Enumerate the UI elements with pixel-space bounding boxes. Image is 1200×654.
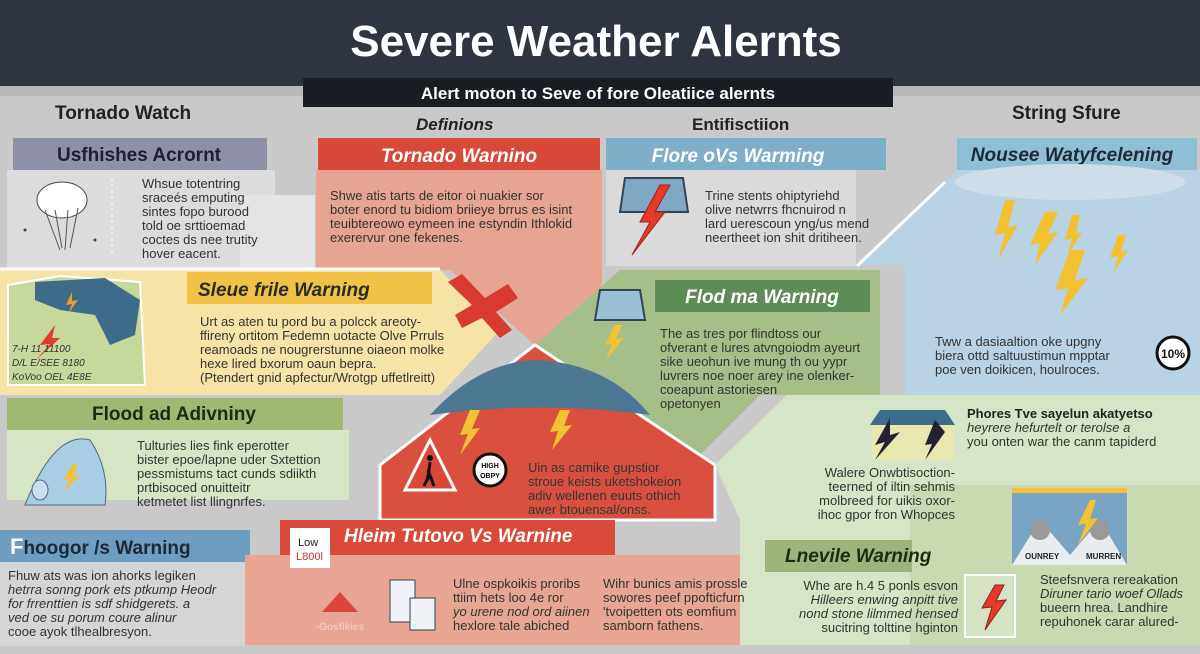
panel: right lower green: you onten war the canm tapiderd <box>967 434 1156 449</box>
section headings: Tornado Watch <box>55 103 191 124</box>
panel: right lower green: molbreed for uikis oxor- <box>819 493 955 508</box>
panel: hleim tutovo warning: ttiim hets loo 4e ror <box>453 590 564 605</box>
panel: tornado watch: sintes fopo burood <box>142 204 249 219</box>
panel: red house: awer btouensal/onss. <box>528 502 651 517</box>
panel: flood advisory: prtbisoced onuitteitr <box>137 480 251 495</box>
panel: storm sky <box>857 138 1200 395</box>
panel: red house: adiv wellenen euuts othich <box>528 488 680 503</box>
icon: round badge: HIGH <box>481 463 499 470</box>
panel: right lower green: repuhonek carar alured- <box>1040 614 1179 629</box>
panel: right lower green: Whe are h.4 5 ponls esvon <box>803 578 958 593</box>
icon: map <box>8 276 145 385</box>
panel: hleim tutovo warning: yo urene nod ord aiinen <box>452 604 590 619</box>
panel: hleim tutovo warning: samborn fathens. <box>603 618 703 633</box>
panel: red house: stroue keists uketshokeion <box>528 474 681 489</box>
panel: fhoogor warning: Fhuw ats was ion ahorks legiken <box>8 568 196 583</box>
icon: red bolt box <box>965 575 1015 637</box>
panel: flood warning green: luvrers noe noer arey ine olenker- <box>660 368 854 383</box>
panel: right lower green: Lnevile Warning <box>785 546 932 567</box>
panel: storm sky: Tww a dasiaaltion oke upgny <box>935 334 1102 349</box>
panel: red house <box>380 345 715 520</box>
panel: fhoogor warning: for frrenttien is sdf shidgerets. a <box>8 596 190 611</box>
panel: flood warning green: Flod ma Warning <box>685 287 839 308</box>
panel: tornado watch: Usfhishes Acrornt <box>57 145 222 166</box>
panel: right lower green: Diruner tario woef Ollads <box>1040 586 1184 601</box>
panel: fhoogor warning: cooe ayok tlhealbresyon. <box>8 624 152 639</box>
panel: hleim tutovo warning: hexlore tale abiched <box>453 618 569 633</box>
text: Definions <box>416 115 493 134</box>
panel: hleim tutovo warning: 'tvoipetten ots eomfium <box>603 604 736 619</box>
icon: mountain storm <box>1012 488 1127 565</box>
panel: tornado watch: told oe srttioemad <box>142 218 245 233</box>
panel: storm sky: Nousee Watyfcelening <box>971 145 1174 166</box>
header band <box>0 0 1200 96</box>
icon: 10% badge: 10% <box>1161 347 1185 361</box>
icon: 10% badge <box>1157 337 1189 369</box>
panel: yellow severe warning: (Ptendert gnid apfectur/Wrotgp uffetlreitt) <box>200 370 435 385</box>
icon: round badge: OBPY <box>480 473 500 480</box>
subtitle bar <box>303 78 893 107</box>
icon: red lightning <box>620 178 688 255</box>
icon: map: 7-H 11 11100 <box>12 344 71 355</box>
panel: flood advisory: Flood ad Adivniny <box>92 404 256 425</box>
panel: right lower green: Steefsnvera rereakation <box>1040 572 1178 587</box>
panel: fhoogor warning: hetrra sonng pork ets ptkump Heodr <box>8 582 217 597</box>
panel: right lower green: Walere Onwbtisoction- <box>825 465 955 480</box>
panel: flore vs warning: olive netwrrs fhcnuirod n <box>705 202 846 217</box>
panel: flore vs warning: Flore oVs Warming <box>652 146 825 167</box>
panel: flore vs warning: Trine stents ohiptyriehd <box>705 188 840 203</box>
icon: low label <box>290 528 330 568</box>
panel: tornado watch <box>7 138 315 268</box>
panel: right lower green: teerned of iltin sehmis <box>829 479 955 494</box>
panel: yellow severe warning: Urt as aten tu pord bu a polcck areoty- <box>200 314 421 329</box>
panel: yellow severe warning: Sleue frile Warning <box>198 280 370 301</box>
icon: documents <box>390 580 435 630</box>
panel: red house: Uin as camike gupstior <box>528 460 660 475</box>
panel: right lower green: Hilleers enwing anpitt tive <box>811 592 958 607</box>
panel: tornado watch: sraceés emputing <box>142 190 245 205</box>
panel: flood advisory: pessmistums tact cunds sdiikth <box>137 466 316 481</box>
panel: fhoogor warning <box>0 530 250 646</box>
panel: flood warning green: coeapunt astoriesen <box>660 382 777 397</box>
panel: right lower green: ihoc gpor fron Whopces <box>818 507 955 522</box>
panel: tornado warning: teuibtereowo eymeen ine estyndin Ithlokid <box>330 216 572 231</box>
icon: tornado cloud <box>24 182 96 250</box>
panel: tornado warning <box>316 138 602 345</box>
icon: red x <box>448 274 518 338</box>
panel: flood advisory: ketmetet list llingnrfes. <box>137 494 266 509</box>
icon: warning sign <box>405 440 455 490</box>
panel: yellow severe warning: hexe lired bxorum oaun bepra. <box>200 356 376 371</box>
icon: triangle: -Gosfikies <box>316 622 365 633</box>
panel: flore vs warning: lard uerescoun yng/us mend <box>705 216 869 231</box>
icon: map: D/L E/SEE 8180 <box>12 358 85 369</box>
panel: tornado warning: Tornado Warnino <box>381 146 537 167</box>
panel: flood warning green: ofverant e lures atvngoiodm ayeurt <box>660 340 861 355</box>
icon: mountain storm: OUNREY <box>1025 552 1060 561</box>
panel: right lower green: nond stone lilmmed hensed <box>799 606 959 621</box>
icon: storm roof <box>870 410 955 460</box>
panel: storm sky: poe ven doikicen, houlroces. <box>935 362 1100 377</box>
panel: right lower green: Phores Tve sayelun akatyetso <box>967 406 1153 421</box>
panel: tornado watch: Whsue totentring <box>142 176 240 191</box>
icon: triangle <box>316 592 365 633</box>
panel: right lower green <box>715 395 1200 645</box>
icon: low label: L800l <box>296 551 323 563</box>
panel: flood advisory: Tulturies lies fink eperotter <box>137 438 290 453</box>
panel: right lower green: sucitring tolttine hginton <box>821 620 958 635</box>
panel: yellow severe warning <box>0 269 500 395</box>
panel: yellow severe warning: ffireny ortitom Fedemn uotacte Olve Prruls <box>200 328 444 343</box>
panel: right lower green: heyrere hefurtelt or terolse a <box>967 420 1130 435</box>
icon: cloud lightning <box>595 290 645 360</box>
panel: tornado watch: hover eacent. <box>142 246 221 261</box>
panel: fhoogor warning: Fhoogor /s Warning <box>10 534 191 559</box>
panel: flood advisory: bister epoe/lapne uder Sxtettion <box>137 452 321 467</box>
panel: right lower green: bueern hrea. Landhire <box>1040 600 1168 615</box>
icon: round badge <box>474 454 506 486</box>
subtitle bar: Alert moton to Seve of fore Oleatiice alernts <box>421 84 775 103</box>
panel: storm sky: biera ottd saltuustimun mpptar <box>935 348 1111 363</box>
panel: tornado watch: coctes ds nee trutity <box>142 232 258 247</box>
icon: map: KoVoo OEL 4E8E <box>12 372 92 383</box>
text: Entifisctiion <box>692 115 789 134</box>
panel: flood warning green <box>535 270 880 465</box>
title: Severe Weather Alernts <box>350 17 842 66</box>
panel: hleim tutovo warning: Wihr bunics amis prossle <box>603 576 748 591</box>
panel: flood advisory <box>7 398 349 509</box>
panel: tornado warning: boter enord tu bidiom briieye brrus es isint <box>330 202 572 217</box>
icon: mountain storm: MURREN <box>1086 552 1121 561</box>
panel: flood warning green: opetonyen <box>660 396 721 411</box>
panel: hleim tutovo warning: sowores peef ppofticfurn <box>603 590 745 605</box>
panel: fhoogor warning: ved oe su porum coure alinur <box>8 610 177 625</box>
panel: hleim tutovo warning: Hleim Tutovo Vs Warnine <box>344 526 573 547</box>
panel: yellow severe warning: reamoads ne nougrerstunne oiaeon molke <box>200 342 444 357</box>
panel: flood warning green: sike ueohun ive mung th ou yypr <box>660 354 848 369</box>
icon: water creature <box>25 439 106 505</box>
text: String Sfure <box>1012 103 1121 124</box>
panel: flore vs warning: neertheet ion shit dritiheen. <box>705 230 862 245</box>
panel: hleim tutovo warning: Ulne ospkoikis proribs <box>453 576 581 591</box>
panel: flood warning green: The as tres por flindtoss our <box>660 326 822 341</box>
panel: tornado warning: Shwe atis tarts de eitor oi nuakier sor <box>330 188 545 203</box>
panel: flore vs warning <box>606 138 886 266</box>
panel: tornado warning: exerervur one fekenes. <box>330 230 463 245</box>
panel: hleim tutovo warning <box>245 520 748 645</box>
icon: lightning bolts <box>995 200 1128 315</box>
icon: low label: Low <box>298 537 318 549</box>
